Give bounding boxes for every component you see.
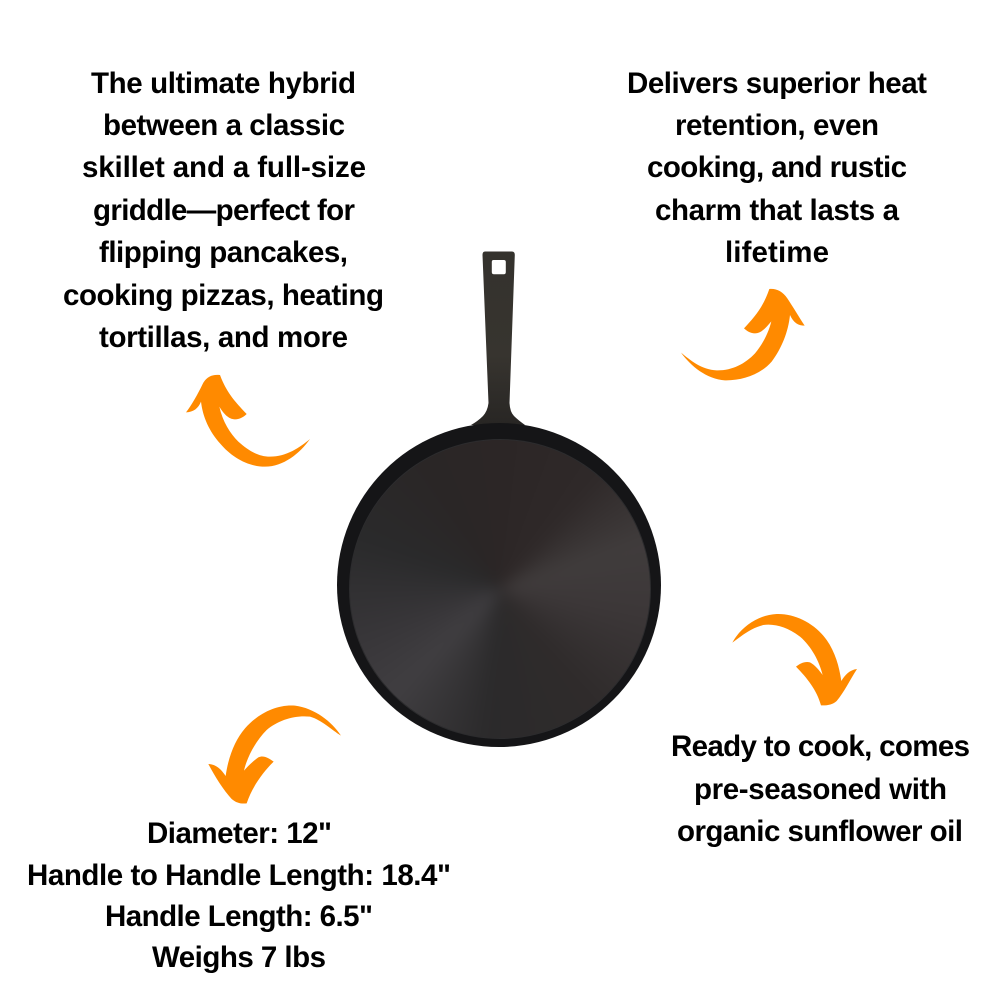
text block: ready to cook: organic sunflower oil (677, 815, 963, 848)
text block: heat retention: retention, even (675, 109, 879, 142)
pan handle (471, 252, 525, 425)
text block: hybrid description: between a classic (103, 109, 345, 142)
arrow: bottom right (732, 614, 857, 705)
pan photo (337, 252, 661, 747)
text block: heat retention (627, 67, 927, 269)
text block: hybrid description: tortillas, and more (99, 321, 348, 354)
text block: ready to cook: pre-seasoned with (694, 773, 947, 806)
text block: hybrid description: griddle—perfect for (93, 194, 356, 227)
arrow: top left (186, 375, 310, 467)
text block: hybrid description (63, 67, 384, 354)
text block: hybrid description: skillet and a full-size (82, 151, 366, 184)
text block: heat retention: cooking, and rustic (647, 151, 907, 184)
text block: ready to cook (671, 730, 970, 848)
text block: dimensions (27, 817, 451, 974)
text block: dimensions: Handle Length: 6.5" (105, 900, 373, 933)
pan cooking surface (350, 440, 650, 738)
pan rim (337, 423, 661, 747)
text block: ready to cook: Ready to cook, comes (671, 730, 970, 763)
arrow: top right (681, 289, 805, 380)
arrow: bottom left (208, 706, 341, 804)
text block: dimensions: Handle to Handle Length: 18.4" (27, 859, 451, 892)
text block: heat retention: charm that lasts a (655, 194, 900, 227)
text block: dimensions: Diameter: 12" (147, 817, 332, 850)
text block: heat retention: Delivers superior heat (627, 67, 927, 100)
text block: hybrid description: cooking pizzas, heating (63, 279, 384, 312)
text block: hybrid description: flipping pancakes, (99, 236, 348, 269)
text block: dimensions: Weighs 7 lbs (152, 941, 326, 974)
text block: hybrid description: The ultimate hybrid (91, 67, 356, 100)
text block: heat retention: lifetime (725, 236, 829, 269)
